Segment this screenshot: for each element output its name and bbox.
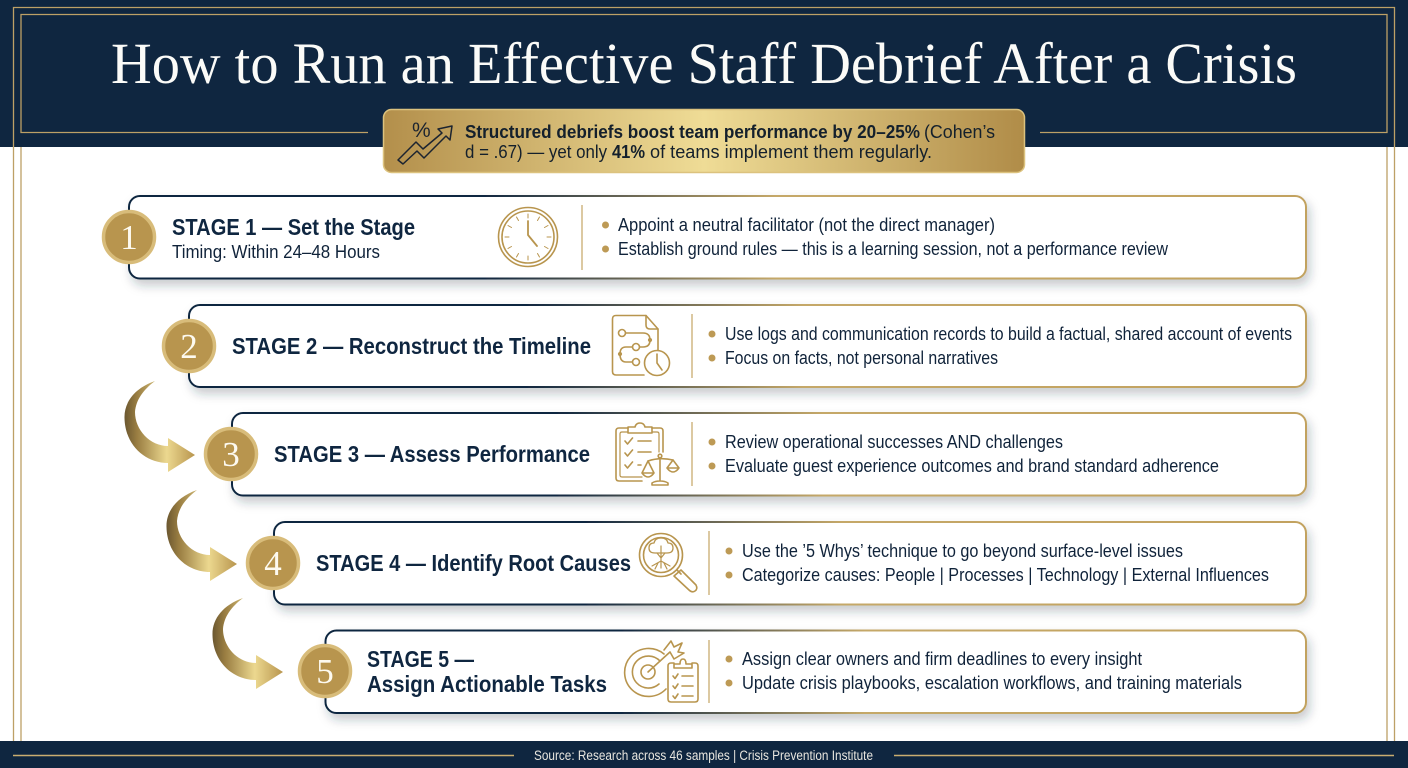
arrow: stage 2 to 3 — [124, 381, 195, 472]
callout text: Structured debriefs boost team performance by 20–25% — [465, 122, 920, 142]
panel: stage 2 — [164, 305, 1306, 387]
callout text: (Cohen’s — [924, 122, 995, 142]
arrow: stage 3 to 4 — [166, 490, 237, 581]
badge 1: 1 — [120, 218, 138, 257]
stage 5 bullets: Update crisis playbooks, escalation workflows, and training materials — [742, 672, 1242, 693]
badge 5: 5 — [316, 652, 334, 691]
panel: stage 4 — [248, 522, 1306, 604]
stage 2 heading: STAGE 2 — Reconstruct the Timeline — [232, 333, 591, 359]
badge 5 — [300, 646, 350, 696]
stage 5 heading — [367, 646, 607, 697]
callout: key statistic — [384, 110, 1024, 172]
stage 5 bullets: Assign clear owners and firm deadlines to every insight — [742, 648, 1142, 669]
stage 4 bullets: Use the ’5 Whys’ technique to go beyond surface-level issues — [742, 540, 1183, 561]
badge 3: 3 — [222, 435, 240, 474]
badge 2: 2 — [180, 327, 198, 366]
stage 5 heading: STAGE 5 — — [367, 646, 474, 672]
stage 4 bullets: Categorize causes: People | Processes | Technology | External Influences — [742, 564, 1269, 585]
icon: clipboard and scales — [616, 423, 679, 485]
arrow: stage 4 to 5 — [212, 598, 283, 689]
stage 4 heading: STAGE 4 — Identify Root Causes — [316, 550, 631, 576]
badge 2 — [164, 320, 214, 372]
stage 1 bullets: Appoint a neutral facilitator (not the direct manager) — [618, 214, 995, 235]
title: How to Run an Effective Staff Debrief After a Crisis — [111, 31, 1297, 96]
panel: stage 1 — [104, 196, 1306, 278]
icon: document timeline — [612, 316, 670, 376]
panel: stage 5 — [300, 630, 1306, 713]
icon: percent growth arrow: % — [412, 119, 431, 142]
callout text: 41% — [612, 142, 645, 162]
stage 3 heading: STAGE 3 — Assess Performance — [274, 441, 590, 467]
badge 1 — [104, 212, 154, 262]
stage 2 bullets: Focus on facts, not personal narratives — [725, 347, 998, 368]
badge 3 — [206, 428, 256, 480]
stage 3 bullets — [708, 431, 1219, 476]
icon: clock — [498, 208, 558, 266]
callout text: of teams implement them regularly. — [650, 142, 932, 162]
stage 1 bullets — [602, 214, 1169, 259]
stage 5 bullets — [726, 648, 1242, 693]
stage 5 heading: Assign Actionable Tasks — [367, 671, 607, 697]
stage 2 bullets: Use logs and communication records to build a factual, shared account of events — [725, 323, 1292, 344]
stage 3 bullets: Review operational successes AND challenges — [725, 431, 1063, 452]
stage 1 heading: STAGE 1 — Set the Stage — [172, 214, 415, 240]
badge 4 — [248, 538, 298, 588]
source text: Source: Research across 46 samples | Crisis Prevention Institute — [534, 748, 873, 763]
icon: target and checklist — [625, 641, 698, 702]
callout text — [465, 122, 995, 162]
callout text: d = .67) — yet only — [465, 142, 607, 162]
stage 4 bullets — [726, 540, 1269, 585]
stage 1 bullets: Establish ground rules — this is a learning session, not a performance review — [618, 238, 1169, 259]
icon: percent growth arrow — [398, 119, 452, 164]
header band — [0, 0, 1408, 147]
footer band — [0, 741, 1408, 768]
stage 1 timing: Timing: Within 24–48 Hours — [172, 241, 380, 262]
stage 2 bullets — [708, 323, 1292, 368]
panel: stage 3 — [206, 413, 1306, 496]
stage 3 bullets: Evaluate guest experience outcomes and brand standard adherence — [725, 455, 1219, 476]
icon: magnifier and root tree — [640, 534, 697, 592]
badge 4: 4 — [264, 544, 282, 583]
